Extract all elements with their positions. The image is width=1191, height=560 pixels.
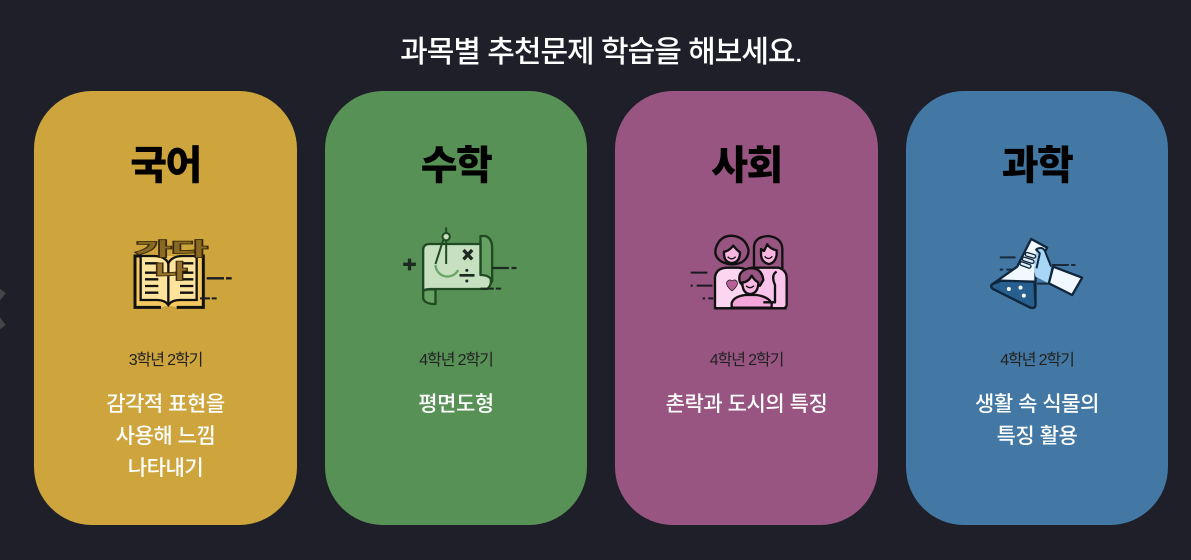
icon: hand holding flask bbox=[990, 238, 1084, 310]
description bbox=[975, 393, 1099, 448]
grade label: 3학년 2학기 bbox=[129, 352, 202, 369]
description: 사용해 느낌 bbox=[116, 425, 215, 448]
icon: map scroll with compass and math symbols bbox=[403, 227, 516, 306]
icon: family of three bbox=[690, 234, 788, 310]
grade label: 4학년 2학기 bbox=[419, 352, 493, 369]
panel: 사회 bbox=[615, 91, 878, 525]
description: 특징 활용 bbox=[997, 425, 1077, 448]
description: 나타내기 bbox=[128, 457, 203, 480]
panel: 과학 bbox=[906, 91, 1168, 525]
grade label: 4학년 2학기 bbox=[1000, 352, 1074, 369]
title: 과목별 추천문제 학습을 해보세요. bbox=[400, 36, 802, 69]
icon: open book with Korean letters bbox=[134, 239, 232, 309]
description bbox=[106, 393, 225, 480]
carousel previous arrow bbox=[0, 289, 6, 329]
icon: open book with Korean letters: 가다 bbox=[135, 239, 209, 259]
icon: open book with Korean letters: 나 bbox=[155, 261, 188, 283]
heading: 과학: 과학 bbox=[1002, 144, 1072, 188]
description: 감각적 표현을 bbox=[106, 393, 225, 416]
description: 생활 속 식물의 bbox=[975, 393, 1099, 416]
panel: 국어 bbox=[34, 91, 297, 525]
description: 촌락과 도시의 특징 bbox=[666, 393, 827, 416]
heading: 국어: 국어 bbox=[130, 144, 201, 188]
description: 평면도형 bbox=[418, 393, 494, 416]
heading: 사회: 사회 bbox=[711, 144, 782, 188]
heading: 수학: 수학 bbox=[421, 144, 491, 188]
grade label: 4학년 2학기 bbox=[710, 352, 783, 369]
panel: 수학 bbox=[325, 91, 587, 525]
